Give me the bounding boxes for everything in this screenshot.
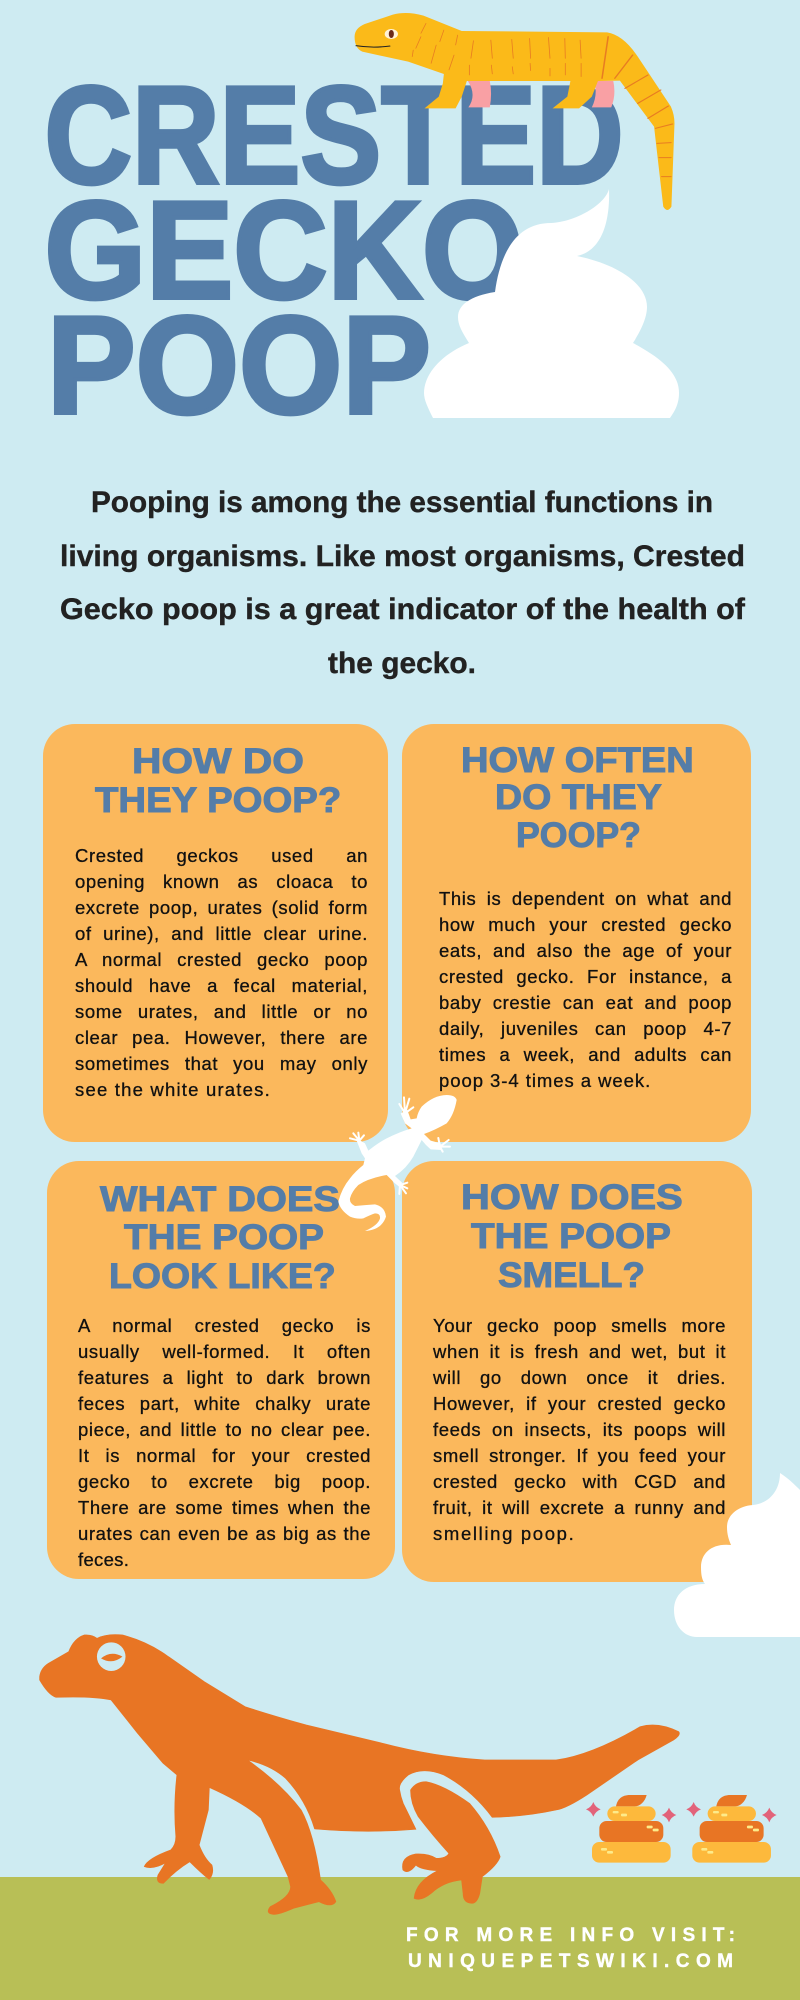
text: what does the poop look like: urates can even be as big as the <box>78 1523 371 1544</box>
footer text <box>406 1925 735 1972</box>
icon: small poop with sparkles, right <box>686 1795 777 1863</box>
footer text: UNIQUEPETSWIKI.COM <box>408 1951 733 1972</box>
text: what does the poop look like: usually well-formed. It often <box>78 1341 371 1362</box>
intro text: the gecko. <box>328 647 476 680</box>
intro text: Pooping is among the essential functions in <box>91 486 713 519</box>
text: how often do they poop: poop 3-4 times a week. <box>439 1070 651 1091</box>
text: how do they poop: Crested geckos used an <box>75 845 368 866</box>
text: how often do they poop <box>439 888 732 1092</box>
heading: what does the poop look like: THE POOP <box>124 1218 324 1257</box>
text: what does the poop look like: feces. <box>78 1549 129 1570</box>
text: how often do they poop: daily, juveniles can poop 4-7 <box>439 1018 732 1039</box>
text: how does the poop smell: smell stronger. If you feed your <box>433 1445 726 1466</box>
text: how does the poop smell: However, if your crested gecko <box>433 1393 726 1414</box>
heading: how does the poop smell: HOW DOES <box>461 1177 683 1216</box>
text: how often do they poop: eats, and also the age of your <box>439 940 732 961</box>
text: how do they poop: A normal crested gecko poop <box>75 949 368 970</box>
heading: how does the poop smell <box>461 1177 683 1295</box>
text: how do they poop: should have a fecal material, <box>75 975 368 996</box>
icon: yellow gecko on the title <box>355 13 674 210</box>
heading: what does the poop look like <box>99 1179 340 1296</box>
footer text: FOR MORE INFO VISIT: <box>406 1925 735 1946</box>
heading: how do they poop: HOW DO <box>132 743 304 781</box>
heading: what does the poop look like: WHAT DOES <box>100 1179 340 1218</box>
icon: white poop at right edge <box>674 1473 800 1637</box>
heading: how does the poop smell: SMELL? <box>498 1256 645 1295</box>
heading: how does the poop smell: THE POOP <box>471 1217 671 1256</box>
panel: how does the poop smell <box>402 1161 752 1582</box>
text: what does the poop look like: A normal crested gecko is <box>78 1315 371 1336</box>
heading: how often do they poop: POOP? <box>516 816 641 855</box>
text: how often do they poop: times a week, and adults can <box>439 1044 732 1065</box>
text: what does the poop look like: features a light to dark brown <box>78 1367 371 1388</box>
text: how does the poop smell: will go down once it dries. <box>433 1367 726 1388</box>
title: POOP <box>47 287 431 443</box>
text: what does the poop look like: piece, and little to no clear pee. <box>78 1419 371 1440</box>
text: how does the poop smell: fruit, it will excrete a runny and <box>433 1497 726 1518</box>
ground <box>0 1877 800 2000</box>
panel: how do they poop <box>43 724 388 1142</box>
text: how do they poop: clear pea. However, there are <box>75 1027 368 1048</box>
text: how do they poop: some urates, and little or no <box>75 1001 368 1022</box>
panel: how often do they poop <box>402 724 751 1142</box>
intro text: Gecko poop is a great indicator of the health of <box>60 593 746 626</box>
icon: small poop with sparkles, left <box>586 1795 676 1863</box>
text: how do they poop: excrete poop, urates (solid form <box>75 897 368 918</box>
text: what does the poop look like: feces part, white chalky urate <box>78 1393 371 1414</box>
text: how does the poop smell: crested gecko with CGD and <box>433 1471 726 1492</box>
text: how do they poop: see the white urates. <box>75 1079 271 1100</box>
text: what does the poop look like: There are some times when the <box>78 1497 371 1518</box>
panel: what does the poop look like <box>47 1161 395 1579</box>
title: CRESTED <box>44 57 624 213</box>
text: how does the poop smell: Your gecko poop smells more <box>433 1315 726 1336</box>
intro text: living organisms. Like most organisms, Crested <box>60 540 745 573</box>
text: what does the poop look like <box>78 1315 371 1570</box>
text: how do they poop: opening known as cloaca to <box>75 871 368 892</box>
heading: how often do they poop: DO THEY <box>495 777 662 817</box>
text: how do they poop: of urine), and little clear urine. <box>75 923 368 944</box>
text: how often do they poop: how much your crested gecko <box>439 914 732 935</box>
text: how often do they poop: This is dependent on what and <box>439 888 732 909</box>
icon: small white gecko <box>338 1095 457 1231</box>
text: how does the poop smell: when it is fresh and wet, but it <box>433 1341 726 1362</box>
text: how does the poop smell: feeds on insects, its poops will <box>433 1419 726 1440</box>
intro text <box>60 486 746 680</box>
text: how does the poop smell: smelling poop. <box>433 1523 575 1544</box>
text: how does the poop smell <box>432 1315 726 1544</box>
text: how do they poop: sometimes that you may only <box>75 1053 368 1074</box>
heading: how do they poop: THEY POOP? <box>95 781 341 820</box>
heading: how often do they poop <box>461 740 694 855</box>
text: what does the poop look like: It is normal for your crested <box>78 1445 371 1466</box>
title: GECKO <box>44 172 524 328</box>
heading: what does the poop look like: LOOK LIKE? <box>109 1256 336 1296</box>
heading: how do they poop <box>94 743 341 820</box>
icon: white poop <box>424 189 679 418</box>
text: how often do they poop: crested gecko. For instance, a <box>439 966 732 987</box>
icon: orange gecko <box>40 1635 679 1914</box>
text: how often do they poop: baby crestie can eat and poop <box>439 992 732 1013</box>
title <box>44 57 624 443</box>
text: how do they poop <box>74 845 368 1100</box>
text: what does the poop look like: gecko to excrete big poop. <box>78 1471 371 1492</box>
heading: how often do they poop: HOW OFTEN <box>461 740 694 780</box>
